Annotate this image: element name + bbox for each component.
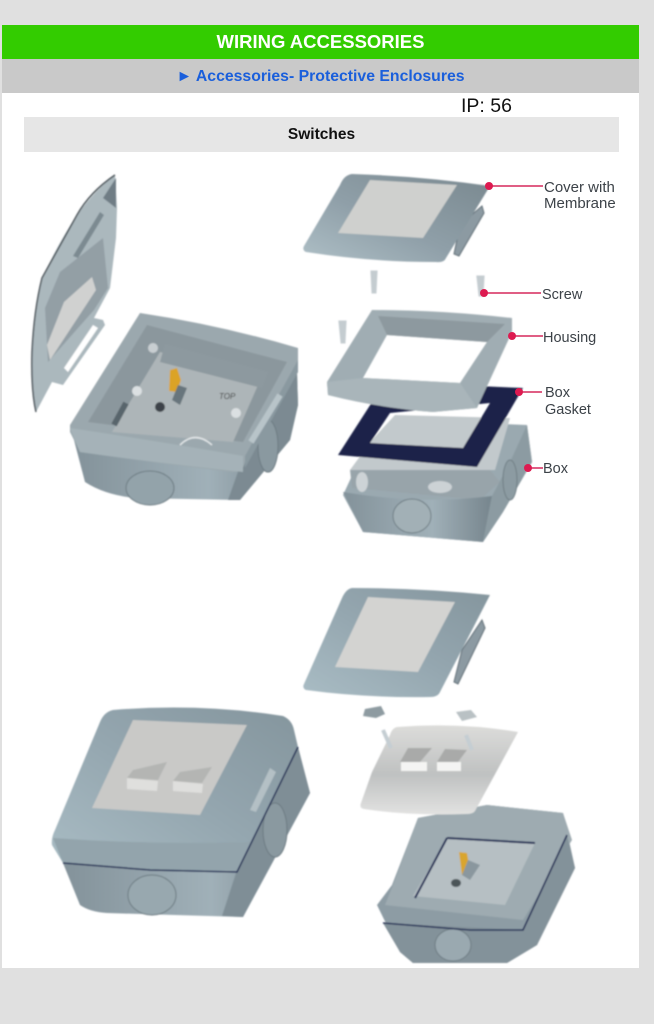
closed box lid (52, 708, 298, 870)
label: housing: Housing (543, 330, 596, 346)
label: box gasket: Box (545, 385, 571, 401)
label: cover with membrane: Cover with (544, 179, 615, 196)
switch plate (360, 725, 518, 814)
label: box (524, 461, 569, 477)
bottom box (377, 805, 575, 963)
internal wiring terminal: TOP (219, 392, 236, 401)
section heading: switches (24, 117, 619, 152)
label: housing (508, 330, 596, 346)
closed box body (63, 747, 310, 917)
box body (74, 372, 298, 505)
housing (327, 310, 512, 412)
screws (340, 272, 483, 342)
section heading: switches: Switches (288, 126, 355, 143)
title banner (2, 25, 639, 59)
illustration: exploded enclosure with switch plate (303, 588, 575, 963)
box gasket (338, 382, 523, 467)
closed box rocker keys (127, 762, 212, 793)
label: cover with membrane: Membrane (544, 195, 616, 212)
internal wiring terminal (114, 343, 280, 445)
subtitle bar (2, 59, 639, 93)
title banner: WIRING ACCESSORIES (216, 31, 424, 52)
closed box seam (63, 747, 298, 872)
IP rating text: IP: 56 (461, 95, 512, 117)
label: cover with membrane (485, 179, 616, 212)
cover with membrane (303, 174, 490, 262)
box rim (70, 313, 298, 472)
label: box: Box (543, 461, 569, 477)
illustration: open enclosure with hinged lid (32, 175, 298, 505)
bottom cover (303, 588, 490, 697)
label: screw: Screw (542, 287, 583, 303)
box (343, 415, 532, 542)
lid (32, 175, 117, 412)
label: screw (480, 287, 583, 303)
label: box gasket: Gasket (545, 402, 591, 418)
illustration: exploded enclosure with part labels (303, 174, 616, 542)
subtitle bar: ► Accessories- Protective Enclosures (176, 68, 465, 85)
label: box gasket (515, 385, 591, 418)
clips (363, 706, 477, 721)
illustration: closed enclosure (52, 708, 310, 917)
